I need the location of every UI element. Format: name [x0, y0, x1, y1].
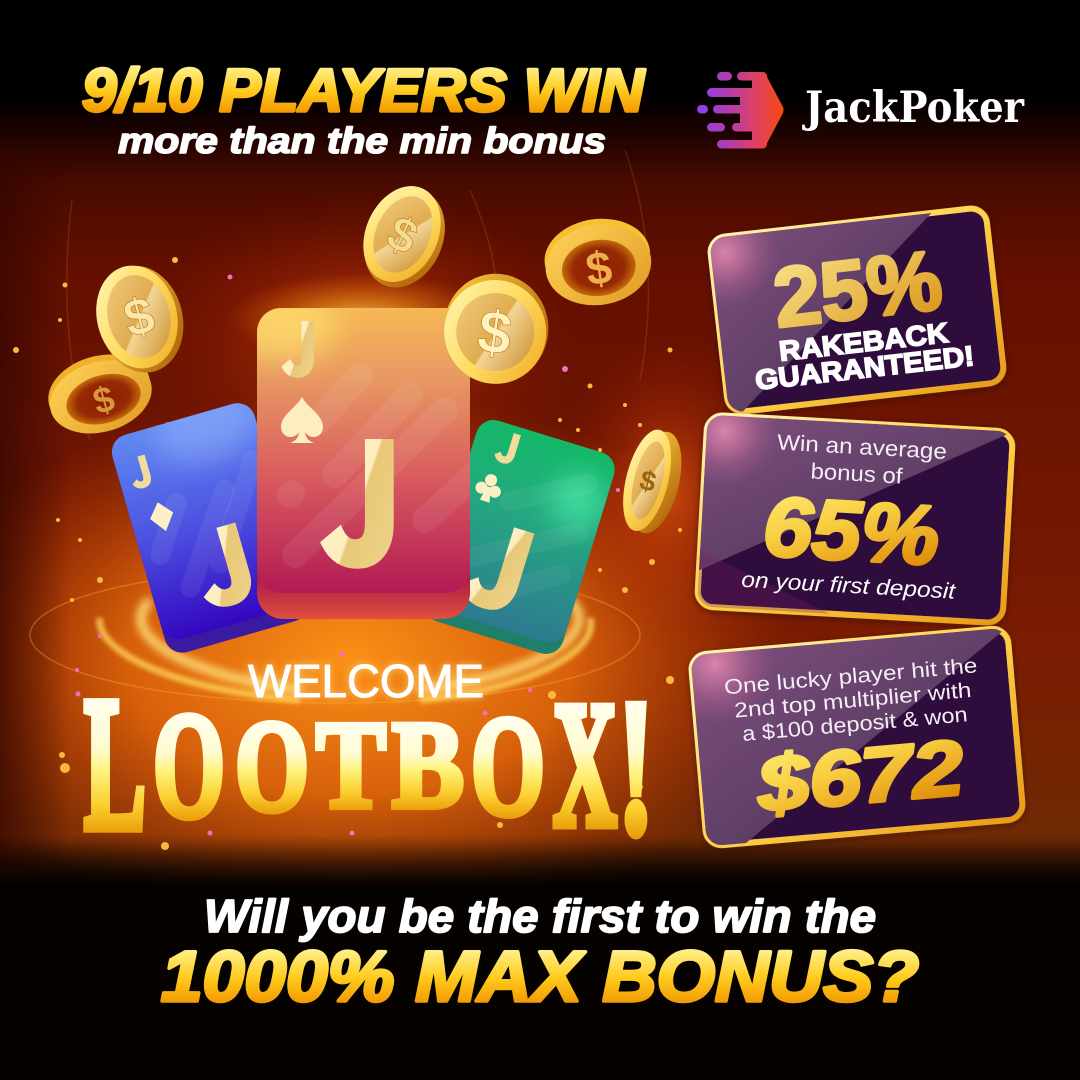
coin: far right narrow: $: [637, 464, 660, 498]
lootbox headline: T: [316, 697, 386, 835]
lootbox headline: L: [84, 658, 146, 869]
coin: top centre: [347, 174, 461, 300]
icon: spade: [281, 397, 323, 443]
lootbox headline: X: [553, 666, 617, 865]
lootbox headline: O: [235, 694, 309, 839]
coin: centre right: [433, 264, 559, 393]
question line: Will you be the first to win the: [204, 890, 876, 942]
stat: $672: $672: [753, 723, 967, 829]
card: green jack of clubs: J: [490, 415, 528, 477]
stat: 25%: 25%: [769, 233, 946, 345]
logo: JackPoker: [697, 72, 1025, 148]
stat: 65%: 65%: [761, 479, 942, 583]
rakeback label: RAKEBACK: [777, 317, 950, 367]
lootbox headline: O: [471, 687, 545, 845]
caption line 3: a $100 deposit & won: [741, 703, 968, 746]
caption line 2: 2nd top multiplier with: [733, 679, 972, 723]
small J index: J: [282, 295, 318, 396]
card: blue jack of diamonds: [112, 403, 300, 653]
coin: top right: $: [583, 240, 615, 295]
coin: left lower: $: [88, 377, 119, 422]
coin: left lower: [40, 343, 160, 445]
bottom call to action: [161, 890, 919, 1017]
coin: far right narrow: [614, 425, 691, 538]
card: blue jack of diamonds: J: [122, 439, 159, 501]
welcome text: WELCOME: [248, 655, 484, 707]
headline: 9/10 players win: 9/10 PLAYERS WIN: [82, 57, 646, 124]
card: red jack of spades: [257, 308, 470, 619]
lootbox headline: !: [618, 661, 654, 875]
sparkles: [13, 257, 682, 850]
glow behind red card: [228, 273, 498, 363]
coin: centre right: $: [474, 297, 516, 368]
coin: top centre: $: [379, 206, 426, 266]
lootbox headline: B: [392, 697, 464, 835]
caption line 2: bonus of: [810, 458, 904, 489]
card: green jack of clubs: [432, 420, 615, 654]
lootbox headline: O: [153, 682, 225, 849]
logo mark: [697, 72, 784, 148]
panel: $672 win: [686, 624, 1028, 850]
coin: left upper: $: [118, 286, 160, 349]
caption line 1: One lucky player hit the: [723, 654, 978, 699]
caption line 3: on your first deposit: [741, 567, 957, 604]
swirl light trails: [67, 150, 648, 440]
sub-headline: more than the min bonus: [118, 120, 606, 161]
lootbox headline: [84, 658, 654, 875]
card: blue jack of diamonds: J: [177, 484, 270, 636]
caption line 1: Win an average: [776, 430, 948, 464]
icon: club: [472, 471, 505, 505]
coin: left upper: [86, 256, 194, 382]
panel: 65% average bonus: [691, 410, 1018, 629]
coin: top right: [540, 212, 656, 312]
logo wordmark: JackPoker: [801, 83, 1025, 133]
card: green jack of clubs: J: [448, 478, 553, 645]
panel: 25% rakeback: [706, 205, 1010, 416]
icon: diamond: [146, 499, 178, 534]
title: [82, 57, 646, 161]
glowing ring under cards: [30, 567, 640, 703]
guaranteed label: GUARANTEED!: [754, 340, 976, 396]
large J: J: [322, 377, 402, 609]
max bonus line: 1000% MAX BONUS?: [161, 938, 919, 1017]
